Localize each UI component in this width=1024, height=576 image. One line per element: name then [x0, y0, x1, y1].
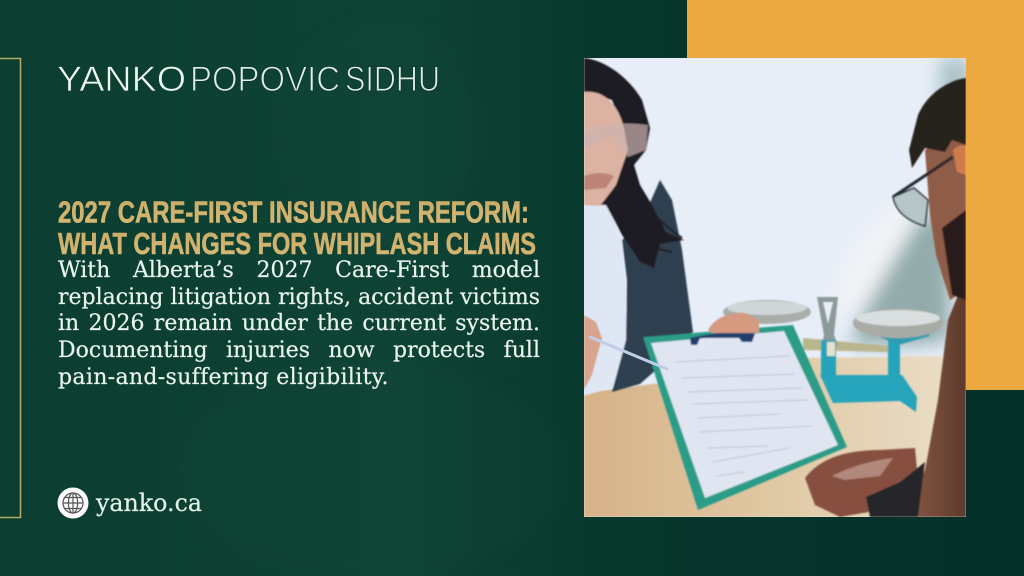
body paragraph: With Alberta’s 2027 Care-First model — [58, 258, 540, 283]
body paragraph — [58, 258, 540, 390]
clipboard with paper — [643, 313, 847, 510]
orange accent block — [687, 0, 1024, 390]
body paragraph: replacing litigation rights, accident victims — [58, 285, 540, 310]
pen — [590, 337, 667, 369]
body paragraph: in 2026 remain under the current system. — [58, 311, 540, 336]
body paragraph: pain-and-suffering eligibility. — [58, 365, 389, 390]
window haze in background — [844, 58, 966, 356]
heading — [58, 194, 536, 261]
logo: YANKO — [57, 60, 186, 99]
icon: globe — [58, 488, 88, 518]
table — [584, 356, 966, 517]
body paragraph: Documenting injuries now protects full — [58, 338, 540, 363]
heading: WHAT CHANGES FOR WHIPLASH CLAIMS — [58, 226, 536, 261]
website label: yanko.ca — [95, 489, 202, 517]
heading: 2027 CARE-FIRST INSURANCE REFORM: — [58, 194, 529, 230]
logo: POPOVIC — [190, 60, 340, 99]
woman figure — [584, 58, 693, 396]
balance scale — [723, 297, 943, 412]
logo: SIDHU — [345, 60, 440, 99]
photo: consultation with scale and clipboard — [584, 58, 970, 517]
gold frame line — [0, 58, 20, 518]
man figure — [805, 78, 966, 517]
logo — [57, 60, 440, 99]
